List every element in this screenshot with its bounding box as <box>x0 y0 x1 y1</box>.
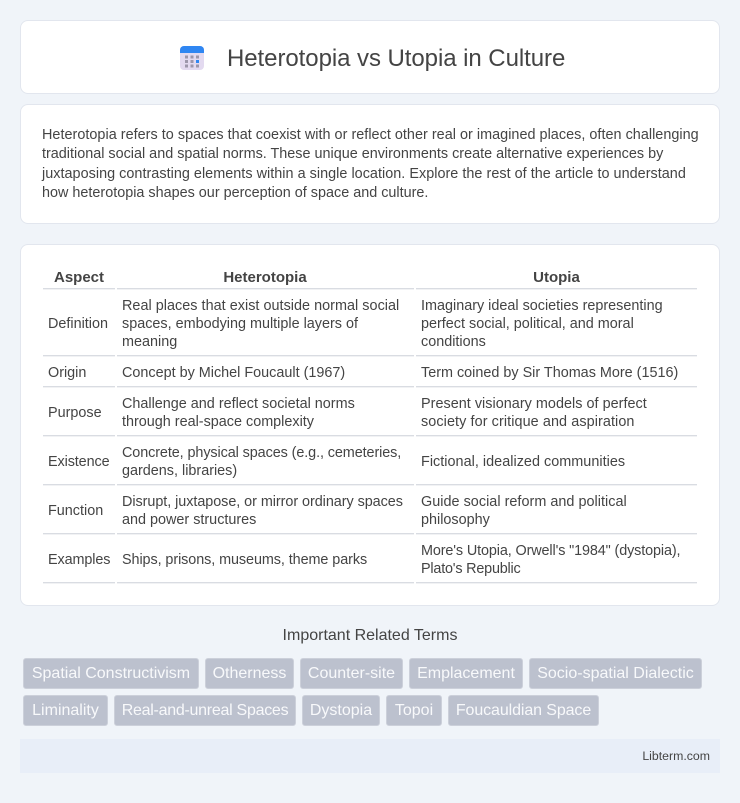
tag: Socio-spatial Dialectic: Socio-spatial Dialectic <box>537 665 694 682</box>
Definition: Heterotopia: Real places that exist outside normal social <box>122 298 399 314</box>
icon: calendar <box>180 46 204 70</box>
Purpose: Utopia: Present visionary models of perfect <box>421 396 647 412</box>
Function: Heterotopia <box>122 494 403 528</box>
Existence: Heterotopia <box>122 445 401 479</box>
Purpose: Heterotopia <box>122 396 355 430</box>
footer: Libterm.com <box>642 749 710 763</box>
tag: Real-and-unreal Spaces: Real-and-unreal Spaces <box>122 702 288 719</box>
Existence: Heterotopia: Concrete, physical spaces (e.g., cemeteries, <box>122 445 401 461</box>
column header: Utopia: Utopia <box>533 269 580 286</box>
tag: Counter-site: Counter-site <box>308 665 395 682</box>
Purpose: Utopia: society for critique and aspiration <box>421 414 635 430</box>
Examples: Utopia: Plato's Republic <box>421 561 521 577</box>
tag: Real-and-unreal Spaces <box>114 695 296 726</box>
tag: Emplacement <box>409 658 523 689</box>
tag: Liminality <box>23 695 108 726</box>
column header: Heterotopia: Heterotopia <box>223 269 307 286</box>
Examples: Utopia <box>421 543 680 577</box>
Function: Heterotopia: Disrupt, juxtapose, or mirror ordinary spaces <box>122 494 403 510</box>
row: Existence: Existence <box>48 454 110 470</box>
tag: Socio-spatial Dialectic <box>529 658 702 689</box>
intro card <box>20 104 720 224</box>
Examples: Utopia: More's Utopia, Orwell's "1984" (dystopia), <box>421 543 680 559</box>
tag: Dystopia <box>302 695 380 726</box>
table card <box>20 244 720 606</box>
Definition: Heterotopia: meaning <box>122 334 177 350</box>
Purpose: Utopia <box>421 396 647 430</box>
tag: Dystopia: Dystopia <box>310 702 372 719</box>
column header: Aspect: Aspect <box>54 269 104 286</box>
Definition: Utopia: conditions <box>421 334 486 350</box>
row: Function: Function <box>48 503 103 519</box>
footer <box>20 739 720 773</box>
Origin: Heterotopia: Concept by Michel Foucault (1967) <box>122 365 345 381</box>
tag: Spatial Constructivism: Spatial Constructivism <box>32 665 190 682</box>
table <box>43 269 697 584</box>
intro text: how heterotopia shapes our perception of space and culture. <box>42 185 428 201</box>
Function: Utopia <box>421 494 627 528</box>
row: Examples: Examples <box>48 552 110 568</box>
row: Origin: Origin <box>48 365 86 381</box>
header card <box>20 20 720 94</box>
Origin: Utopia: Term coined by Sir Thomas More (1516) <box>421 365 678 381</box>
title: Heterotopia vs Utopia in Culture <box>227 45 565 72</box>
Existence: Heterotopia: gardens, libraries) <box>122 463 237 479</box>
Purpose: Heterotopia: Challenge and reflect societal norms <box>122 396 355 412</box>
intro text <box>42 126 699 201</box>
tag: Otherness <box>205 658 294 689</box>
intro text: juxtaposing contrasting elements within a single location. Explore the rest of the article to understand <box>42 166 686 182</box>
intro text: traditional social and spatial norms. These unique environments create alternative experiences by <box>42 146 663 162</box>
tag: Otherness: Otherness <box>213 665 286 682</box>
tag: Topoi: Topoi <box>395 702 433 719</box>
Purpose: Heterotopia: through real-space complexity <box>122 414 314 430</box>
intro text: Heterotopia refers to spaces that coexist with or reflect other real or imagined places, often challenging <box>42 126 699 142</box>
Existence: Utopia: Fictional, idealized communities <box>421 454 625 470</box>
row: Definition: Definition <box>48 316 108 332</box>
tag: Liminality: Liminality <box>32 702 99 719</box>
Definition: Heterotopia <box>122 298 399 350</box>
Definition: Utopia <box>421 298 663 350</box>
tag: Topoi <box>386 695 442 726</box>
tag: Foucauldian Space: Foucauldian Space <box>456 702 591 719</box>
tag: Emplacement: Emplacement <box>417 665 515 682</box>
related terms heading: Important Related Terms <box>283 627 457 644</box>
row: Purpose: Purpose <box>48 405 102 421</box>
Function: Heterotopia: and power structures <box>122 512 256 528</box>
Definition: Utopia: perfect social, political, and moral <box>421 316 634 332</box>
tag: Spatial Constructivism <box>23 658 199 689</box>
Function: Utopia: philosophy <box>421 512 490 528</box>
Function: Utopia: Guide social reform and political <box>421 494 627 510</box>
tag: Foucauldian Space <box>448 695 599 726</box>
Definition: Heterotopia: spaces, embodying multiple layers of <box>122 316 358 332</box>
tag: Counter-site <box>300 658 403 689</box>
Examples: Heterotopia: Ships, prisons, museums, theme parks <box>122 552 367 568</box>
Definition: Utopia: Imaginary ideal societies representing <box>421 298 663 314</box>
